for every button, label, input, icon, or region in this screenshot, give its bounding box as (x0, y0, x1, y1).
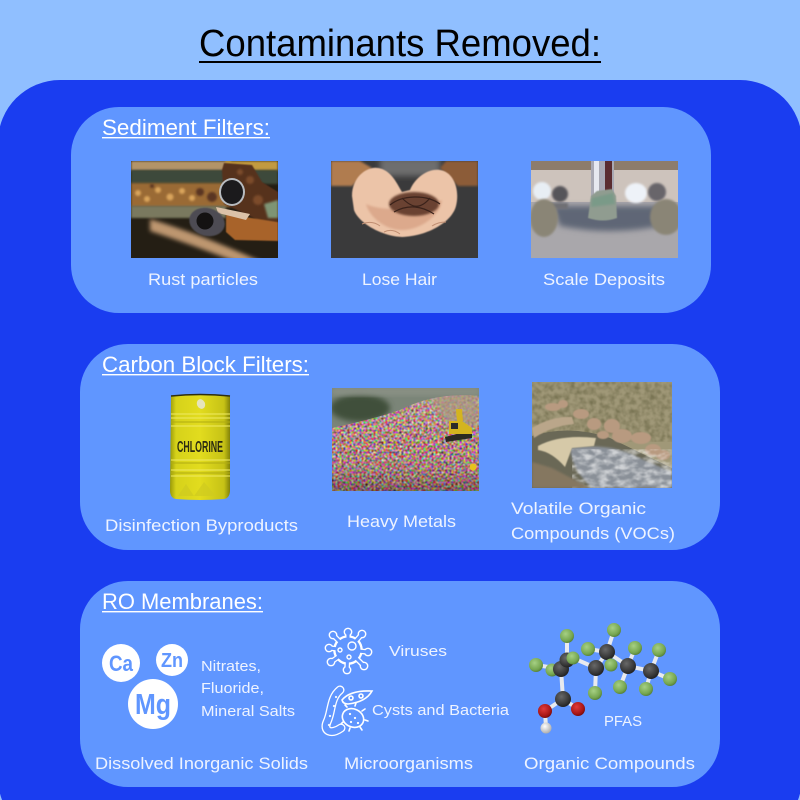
heading: sediment filters: Sediment Filters: (102, 115, 270, 140)
photo: chlorine barrel: CHLORINE (177, 439, 223, 456)
label: volatile organic compounds: Compounds (VOCs) (511, 524, 675, 543)
label: scale deposits: Scale Deposits (543, 270, 665, 289)
panel: carbon block filters (80, 344, 720, 550)
heading: RO membranes: RO Membranes: (102, 589, 263, 614)
icon: mineral elements: Ca (109, 651, 134, 676)
icon: mineral elements: Zn (161, 650, 183, 672)
panel: sediment filters (71, 107, 711, 313)
icon: cysts and bacteria (326, 690, 372, 732)
heading: carbon block filters: Carbon Block Filters: (102, 352, 309, 377)
label: viruses: Viruses (389, 643, 447, 660)
label: organic compounds: Organic Compounds (524, 754, 695, 773)
text: nitrates, fluoride, mineral salts: Nitrates, (201, 658, 261, 675)
label: rust particles: Rust particles (148, 270, 258, 289)
text: nitrates, fluoride, mineral salts (201, 658, 295, 720)
photo: polluted stream (532, 382, 672, 488)
photo: chlorine barrel (170, 394, 230, 500)
label: lose hair: Lose Hair (362, 270, 437, 289)
icon: virus (325, 628, 372, 674)
label: volatile organic compounds (511, 499, 675, 543)
photo: scale deposits on faucet (530, 161, 682, 258)
text: nitrates, fluoride, mineral salts: Mineral Salts (201, 703, 295, 720)
label: heavy metals: Heavy Metals (347, 512, 456, 531)
icon: mineral elements (102, 644, 188, 729)
label: disinfection byproducts: Disinfection Byproducts (105, 516, 298, 535)
icon: PFAS molecule (529, 623, 677, 734)
photo: rusty pipes (131, 161, 278, 262)
text: nitrates, fluoride, mineral salts: Fluoride, (201, 680, 264, 697)
panel: RO membranes (80, 581, 720, 787)
title: Contaminants Removed: (199, 23, 601, 65)
icon: mineral elements: Mg (135, 689, 171, 721)
label: volatile organic compounds: Volatile Organic (511, 499, 647, 518)
label: microorganisms: Microorganisms (344, 754, 473, 773)
photo: hair in cupped hands (331, 158, 478, 258)
label: cysts and bacteria: Cysts and Bacteria (372, 702, 510, 719)
label: PFAS: PFAS (604, 713, 642, 730)
photo: landfill with excavator (330, 388, 479, 491)
label: dissolved inorganic solids: Dissolved Inorganic Solids (95, 754, 308, 773)
